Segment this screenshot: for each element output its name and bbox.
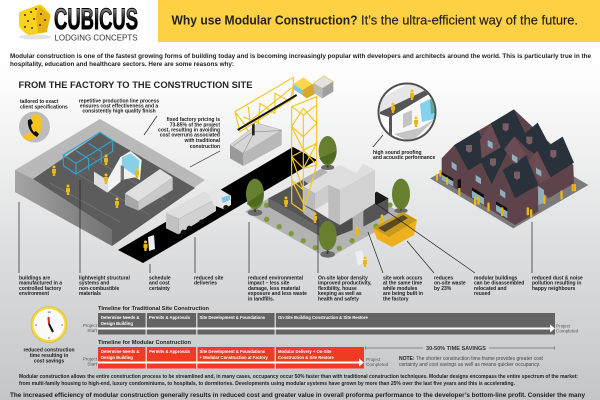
icon: clock: 3: [61, 323, 63, 327]
crane mast: [292, 97, 317, 212]
banner subtitle: It’s the ultra-efficient way of the future.: [361, 14, 578, 28]
callout: environmental impact: damage, less material: [248, 286, 301, 292]
building: [303, 163, 375, 193]
construction site: [245, 163, 405, 258]
callout: labor density: On-site labor density: [318, 276, 368, 282]
timeline: modular: [98, 340, 364, 368]
project completed labels: [366, 324, 579, 367]
callout: environmental impact: reduced environmental: [248, 276, 304, 282]
callout: schedule certainty: [149, 276, 171, 292]
header banner: [158, 0, 600, 42]
banner title: Why use Modular Construction?: [172, 14, 358, 28]
callout: labor density: improved productivity,: [318, 281, 372, 287]
phase labels: Modular Delivery + On-Site: [278, 349, 332, 354]
logo: [19, 3, 138, 42]
icon: plans and worker: [144, 235, 155, 251]
logo tagline: LODGING CONCEPTS: [54, 32, 138, 42]
icon: yellow cube: [19, 5, 51, 39]
crane jib: [235, 76, 333, 132]
bottom statement: The increased efficiency of modular construction generally results in reduced cost and greater value in overall proforma performance to the developer’s bottom-line profit. Consider the many: [10, 392, 585, 399]
crane counterweight: [313, 76, 333, 88]
callout: sound proofing: [373, 150, 435, 161]
callout: simultaneous site work: the factory: [383, 296, 409, 302]
factory walls: [15, 119, 205, 246]
phase labels: Permits & Approvals: [149, 349, 191, 354]
callout: production line: [79, 98, 159, 114]
callout: dust and noise: reduced dust & noise: [532, 276, 583, 282]
project start labels: [83, 323, 98, 366]
callout: labor density: flexibility, house: [318, 286, 357, 292]
callout: waste reduction: reduces: [434, 276, 453, 282]
icon: clock: 9: [35, 323, 37, 327]
crane load: [230, 123, 282, 166]
callout: sound proofing: high sound proofing: [373, 150, 422, 156]
house walls: [442, 109, 574, 225]
module room: [94, 151, 142, 193]
project completed labels: Project: [366, 357, 381, 362]
callout: lightweight systems: [79, 276, 130, 297]
roofs: [454, 109, 574, 198]
icon: plans and worker: [355, 250, 367, 267]
callout: waste reduction: [434, 276, 466, 292]
logo name: CUBICUS: [54, 3, 138, 36]
note: certainty and cost savings as well as means quicker occupancy.: [399, 362, 540, 368]
callout: dust and noise: [532, 276, 583, 292]
factory workers: [52, 154, 139, 208]
callout: schedule certainty: certainty: [149, 286, 170, 292]
callout: relocatable buildings: modular buildings: [474, 276, 518, 282]
callout: fixed pricing: [158, 117, 221, 150]
callout: environmental impact: in landfills.: [248, 296, 275, 302]
callout: waste reduction: by 23%: [434, 286, 452, 292]
crane: [230, 76, 333, 212]
section heading: FROM THE FACTORY TO THE CONSTRUCTION SITE: [18, 80, 253, 90]
intro text: Modular construction is one of the fastest growing forms of building today and is becoming increasingly popular with developers and architects around the world. This is particularly true in the: [10, 54, 592, 60]
callout: production line: ensures cost effectiveness and a: [80, 104, 158, 110]
residents: [436, 170, 576, 217]
phase labels: Site Development & Foundations: [200, 315, 266, 320]
callout: labor density: keeping as well as: [318, 291, 362, 297]
intro text: hospitality, education and healthcare sectors. Here are some reasons why:: [10, 62, 234, 68]
timeline arrow: [98, 328, 550, 330]
intro text: [10, 54, 592, 68]
timeline title: Timeline for Traditional Site Construction: [98, 306, 209, 312]
note: [399, 356, 543, 368]
callout: lightweight systems: systems and: [79, 281, 109, 287]
factory: [15, 119, 205, 246]
callout: dust and noise: happy neighbours: [532, 286, 576, 292]
door lintels: [442, 172, 507, 211]
project start labels: Start: [87, 328, 98, 333]
dark site walls: [268, 180, 353, 232]
callout: fixed pricing: fixed factory pricing is: [167, 117, 220, 123]
phase labels: Permits & Approvals: [149, 315, 191, 320]
leader lines: [19, 116, 532, 273]
clock caption: reduced construction: [23, 348, 75, 354]
callout: waste reduction: on-site waste: [434, 281, 466, 287]
callout: client specifications: [20, 99, 68, 110]
phase labels: Design Building: [101, 321, 133, 326]
project start labels: Start: [87, 362, 98, 366]
time savings bracket: [366, 346, 554, 352]
callout: lightweight systems: lightweight structural: [79, 276, 130, 282]
callout: dust and noise: pollution resulting in: [532, 281, 581, 287]
callout: site deliveries: deliveries: [194, 281, 217, 287]
callout: factory environment: environment: [19, 291, 49, 297]
callout: sound proofing: and acoustic performance: [373, 155, 435, 161]
callout: factory environment: controlled factory: [19, 286, 61, 292]
waste skip: [373, 212, 417, 247]
callout: relocatable buildings: reused: [474, 291, 490, 297]
callout: site deliveries: reduced site: [194, 276, 224, 282]
callout: environmental impact: [248, 276, 307, 302]
phase labels: Determine Needs &: [101, 315, 139, 320]
callout: schedule certainty: and cost: [149, 281, 170, 287]
project start labels: Project: [83, 323, 98, 328]
callout: environmental impact: exposure and less waste: [248, 291, 307, 297]
timeline: traditional: [98, 306, 555, 334]
icon: phone badge: [19, 112, 50, 142]
callout: production line: consistently high quality finish: [82, 108, 156, 114]
icon: clock: [31, 306, 67, 342]
closing paragraph: [19, 374, 578, 387]
callout: relocatable buildings: can be disassembled: [474, 281, 524, 287]
callout: lightweight systems: materials: [79, 291, 101, 297]
crane cab: [293, 77, 312, 90]
callout: fixed pricing: 73-85% of the project: [170, 122, 220, 128]
factory front wall: [15, 170, 112, 246]
phase labels: On-Site Building Construction & Site Restore: [278, 315, 368, 320]
callout: simultaneous site work: are being built in: [383, 291, 423, 297]
phase labels: Determine Needs &: [101, 349, 139, 354]
phase labels: Construction & Site Restore: [278, 355, 335, 360]
phase labels: [101, 315, 368, 326]
closing paragraph: from multi-family housing to high-end, luxury condominiums, to hospitals, to dormitories. Developments using modular systems have grown by more than 25% over the last five years and this is accelerating.: [19, 381, 515, 387]
road: [118, 147, 317, 263]
timeline title: Timeline for Modular Construction: [98, 340, 191, 346]
callout: environmental impact: impact – less site: [248, 281, 290, 287]
red timeline bar: [98, 347, 364, 368]
callout: factory environment: buildings are: [19, 276, 50, 282]
callout: relocatable buildings: relocated and: [474, 286, 507, 292]
project start labels: Project: [83, 356, 98, 362]
blue module frame: [63, 132, 113, 174]
callout: simultaneous site work: while modules: [382, 286, 418, 292]
callout: simultaneous site work: at the same time: [383, 281, 422, 287]
callout: fixed pricing: construction: [190, 144, 220, 150]
callout: lightweight systems: non-combustible: [79, 286, 119, 292]
callout: site deliveries: [194, 276, 224, 287]
icon: clock: 6: [48, 336, 50, 340]
callout: simultaneous site work: [382, 276, 423, 302]
modular houses: [430, 109, 588, 228]
clock caption: cost savings: [34, 358, 64, 364]
callout: fixed pricing: with traditional: [183, 138, 221, 144]
grey timeline bar: [98, 313, 555, 334]
sound proofing inset: [378, 82, 436, 142]
project completed labels: Completed: [366, 362, 389, 367]
phase labels: Site Development & Foundations: [200, 349, 266, 354]
callout: client specifications: client specifications: [20, 104, 68, 110]
timeline arrow: [98, 362, 359, 364]
callout: factory environment: [19, 276, 62, 297]
chimneys: [466, 123, 556, 180]
clock caption: time resulting in: [30, 353, 68, 359]
truck: [166, 188, 231, 235]
callout: factory environment: manufactured in a: [19, 281, 62, 287]
clock caption: [23, 348, 75, 364]
windows: [442, 140, 544, 218]
callout: relocatable buildings: [474, 276, 524, 297]
project completed labels: Project: [556, 324, 571, 328]
callout: labor density: [318, 276, 372, 302]
green planting dots: [264, 202, 393, 251]
callout: labor density: health and safety: [318, 296, 359, 302]
time savings bracket: 30-50% TIME SAVINGS: [426, 346, 486, 352]
trees and site workers: [246, 136, 410, 258]
callout: simultaneous site work: site work occurs: [383, 276, 423, 282]
callout: fixed pricing: cost, resulting in avoiding: [158, 128, 220, 134]
phase labels: Design Building: [101, 355, 133, 360]
callout: schedule certainty: schedule: [149, 276, 171, 282]
project completed labels: Completed: [556, 328, 579, 334]
note: NOTE: The shorter construction time frame provides greater cost: [399, 356, 543, 362]
gable fronts: [480, 123, 551, 183]
callout: production line: repetitive production line process: [79, 98, 159, 104]
factory floor: [33, 133, 195, 246]
factory box: [125, 169, 173, 211]
house plot: [430, 137, 588, 228]
callout: fixed pricing: cost overruns associated: [160, 132, 220, 138]
icon: clock: 12: [47, 310, 51, 314]
phase labels: [101, 349, 335, 360]
callout: client specifications: tailored to exact: [20, 99, 59, 105]
phase labels: + Modular Construction at Factory: [200, 355, 268, 360]
site platform: [245, 168, 405, 258]
